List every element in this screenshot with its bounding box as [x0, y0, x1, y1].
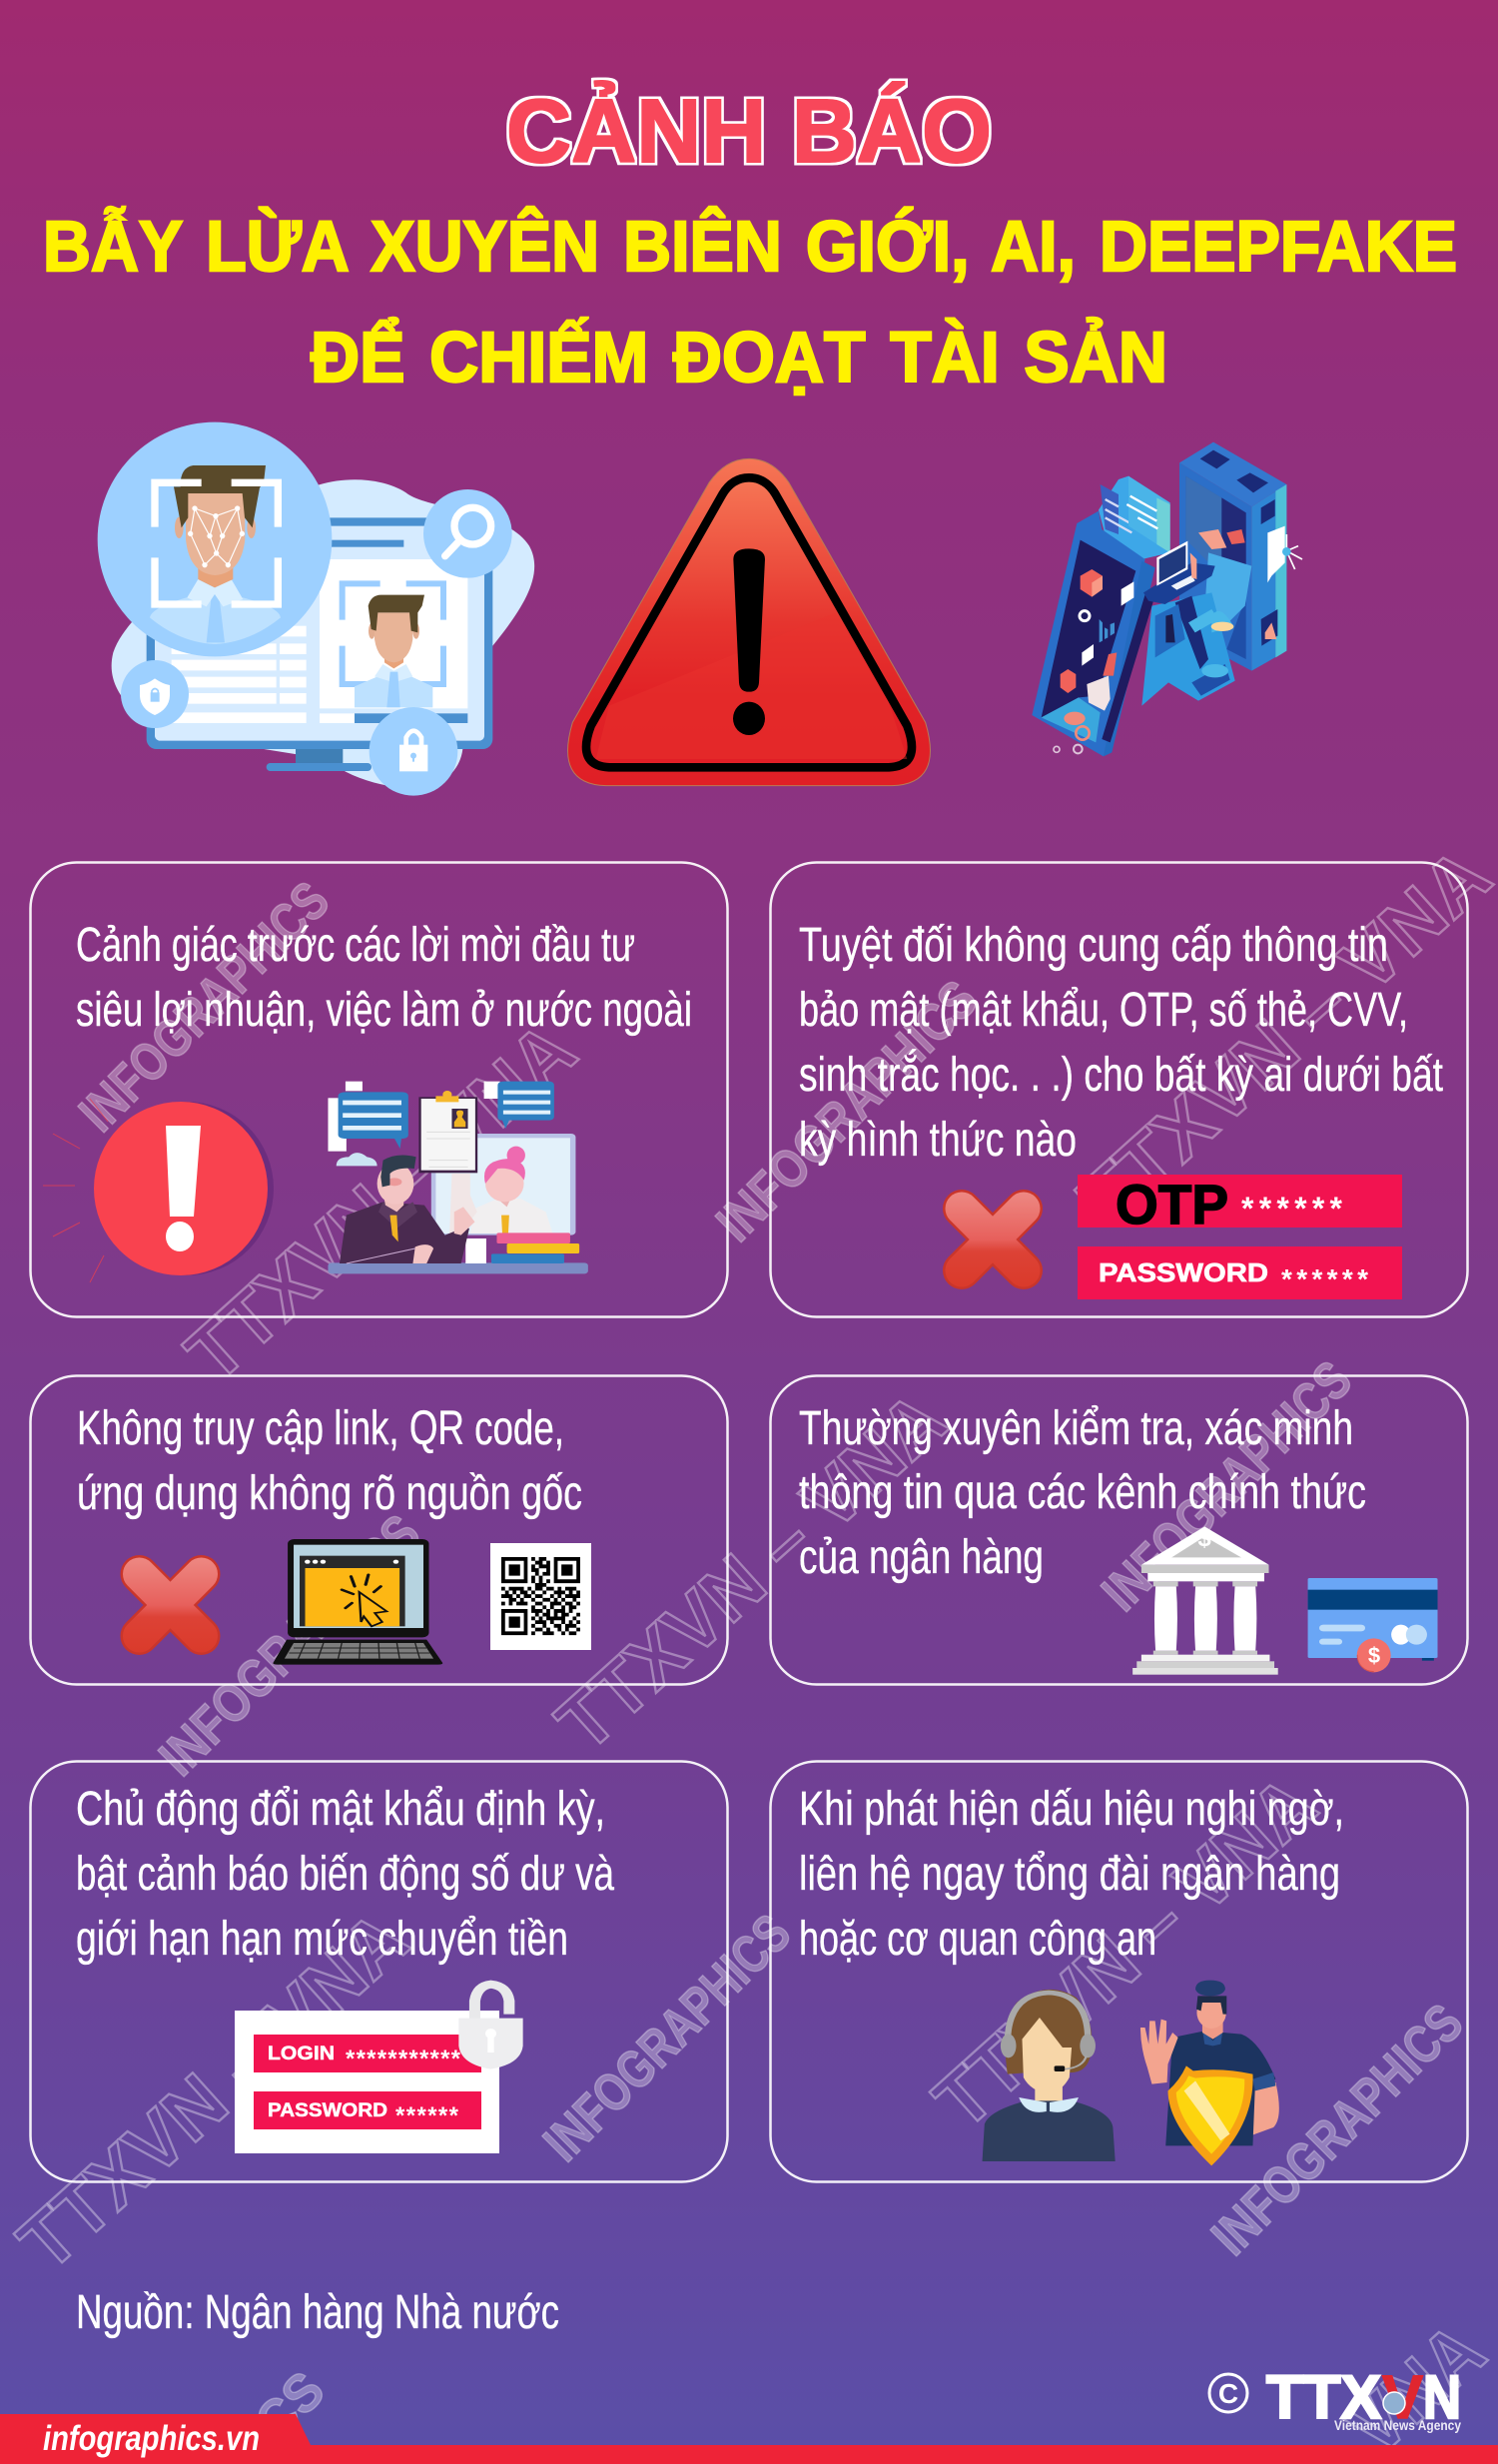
icon: red cross — [962, 1209, 1024, 1270]
text: panel 6 message: liên hệ ngay tổng đài ngân hàng — [799, 1848, 1340, 1901]
watermarks: INFOGRAPHICS — [68, 871, 341, 1143]
text: panel 6 message: Khi phát hiện dấu hiệu nghi ngờ, — [799, 1783, 1344, 1836]
login form with padlock: LOGIN — [268, 2044, 335, 2064]
text: bank dollar sign: $ — [1197, 1525, 1211, 1552]
watermarks: TTXVN – VNA — [917, 1759, 1332, 2145]
OTP field — [1078, 1173, 1402, 1235]
logo: TTXVN: V — [1382, 2363, 1423, 2431]
password field — [1078, 1246, 1402, 1299]
OTP field: ****** — [1241, 1191, 1343, 1227]
login form with padlock: PASSWORD — [268, 2100, 387, 2121]
text: panel 1 message: siêu lợi nhuận, việc làm ở nước ngoài — [76, 984, 692, 1037]
text: panel 6 message: hoặc cơ quan công an — [799, 1913, 1156, 1966]
title: ĐỂ CHIẾM ĐOẠT TÀI SẢN — [311, 318, 1167, 398]
watermarks: INFOGRAPHICS — [148, 1503, 431, 1787]
watermarks: TTXVN – VNA — [1062, 830, 1498, 1243]
panel: change passwords regularly — [30, 1762, 727, 2181]
text: source: Nguồn: Ngân hàng Nhà nước — [76, 2286, 559, 2339]
text: panel 1 message: Cảnh giác trước các lời mời đầu tư — [76, 919, 635, 972]
icon: face recognition monitor — [98, 422, 534, 796]
text: panel 5 message — [76, 1783, 614, 1966]
watermarks: ICS — [234, 2360, 337, 2462]
text: panel 4 message — [799, 1402, 1366, 1584]
panel: avoid unknown links — [30, 1376, 727, 1684]
title: CẢNH BÁO — [506, 80, 992, 182]
icon: padlock — [458, 1985, 523, 2069]
footer bar — [0, 2414, 1498, 2464]
text: panel 5 message: bật cảnh báo biến động số dư và — [76, 1848, 614, 1901]
text: panel 4 message: Thường xuyên kiểm tra, xác minh — [799, 1402, 1353, 1455]
text: panel 3 message: ứng dụng không rõ nguồn gốc — [77, 1467, 582, 1520]
text: coin dollar sign: $ — [1368, 1643, 1380, 1668]
icon: red cross — [140, 1574, 202, 1636]
icon: bank building — [1132, 1526, 1278, 1675]
icon: QR code — [490, 1543, 591, 1650]
text: panel 5 message: giới hạn hạn mức chuyển tiền — [76, 1913, 568, 1966]
illustration: police officer with shield — [1140, 1981, 1279, 2165]
text: panel 3 message — [77, 1402, 582, 1520]
watermarks: TTXVN – VNA — [539, 1374, 963, 1768]
panel: never share credentials — [771, 863, 1468, 1316]
login form with padlock: ****** — [395, 2102, 459, 2129]
text: website: infographics.vn — [43, 2419, 260, 2458]
logo: TTXVN — [1209, 2363, 1461, 2433]
text: panel 1 message — [76, 919, 692, 1037]
password field: ****** — [1281, 1263, 1368, 1294]
text: panel 2 message: kỳ hình thức nào — [799, 1114, 1077, 1167]
panel: report suspicious signs — [771, 1762, 1468, 2181]
text: panel 5 message: Chủ động đổi mật khẩu định kỳ, — [76, 1783, 605, 1836]
watermarks: INFOGRAPHICS — [1091, 1350, 1363, 1622]
OTP field: OTP — [1116, 1173, 1228, 1235]
text: panel 3 message: Không truy cập link, QR code, — [77, 1402, 564, 1455]
text: panel 2 message — [799, 919, 1443, 1167]
watermarks: INFOGRAPHICS — [705, 969, 989, 1252]
watermarks: TTXVN – VNA — [1, 1894, 424, 2287]
logo: TTXVN: N — [1423, 2363, 1461, 2431]
icon: warning triangle — [568, 458, 930, 786]
logo: TTXVN: Vietnam News Agency — [1334, 2417, 1461, 2433]
icon: laptop with cursor — [273, 1539, 442, 1665]
illustration: recruiter video call — [328, 1082, 588, 1273]
panel: be wary of investment offers — [30, 863, 727, 1316]
login form with padlock — [235, 1985, 523, 2153]
password field: PASSWORD — [1099, 1257, 1268, 1287]
title — [43, 80, 1457, 398]
logo: TTXVN: TTX — [1266, 2363, 1381, 2431]
text: panel 6 message — [799, 1783, 1344, 1966]
icon: credit card with coin — [1308, 1578, 1438, 1672]
watermarks — [1, 830, 1498, 2464]
panel: verify via official channels — [771, 1376, 1468, 1684]
icon: isometric AI letters — [1032, 442, 1302, 756]
logo: TTXVN: C — [1218, 2378, 1238, 2409]
text: panel 4 message: của ngân hàng — [799, 1531, 1044, 1584]
illustration: call centre operator — [983, 1990, 1116, 2161]
watermarks: INFOGRAPHICS — [532, 1903, 802, 2172]
login form with padlock: *********** — [346, 2046, 461, 2072]
icon: red exclamation circle — [43, 1099, 274, 1282]
watermarks: TTXVN – VNA — [169, 1005, 592, 1398]
